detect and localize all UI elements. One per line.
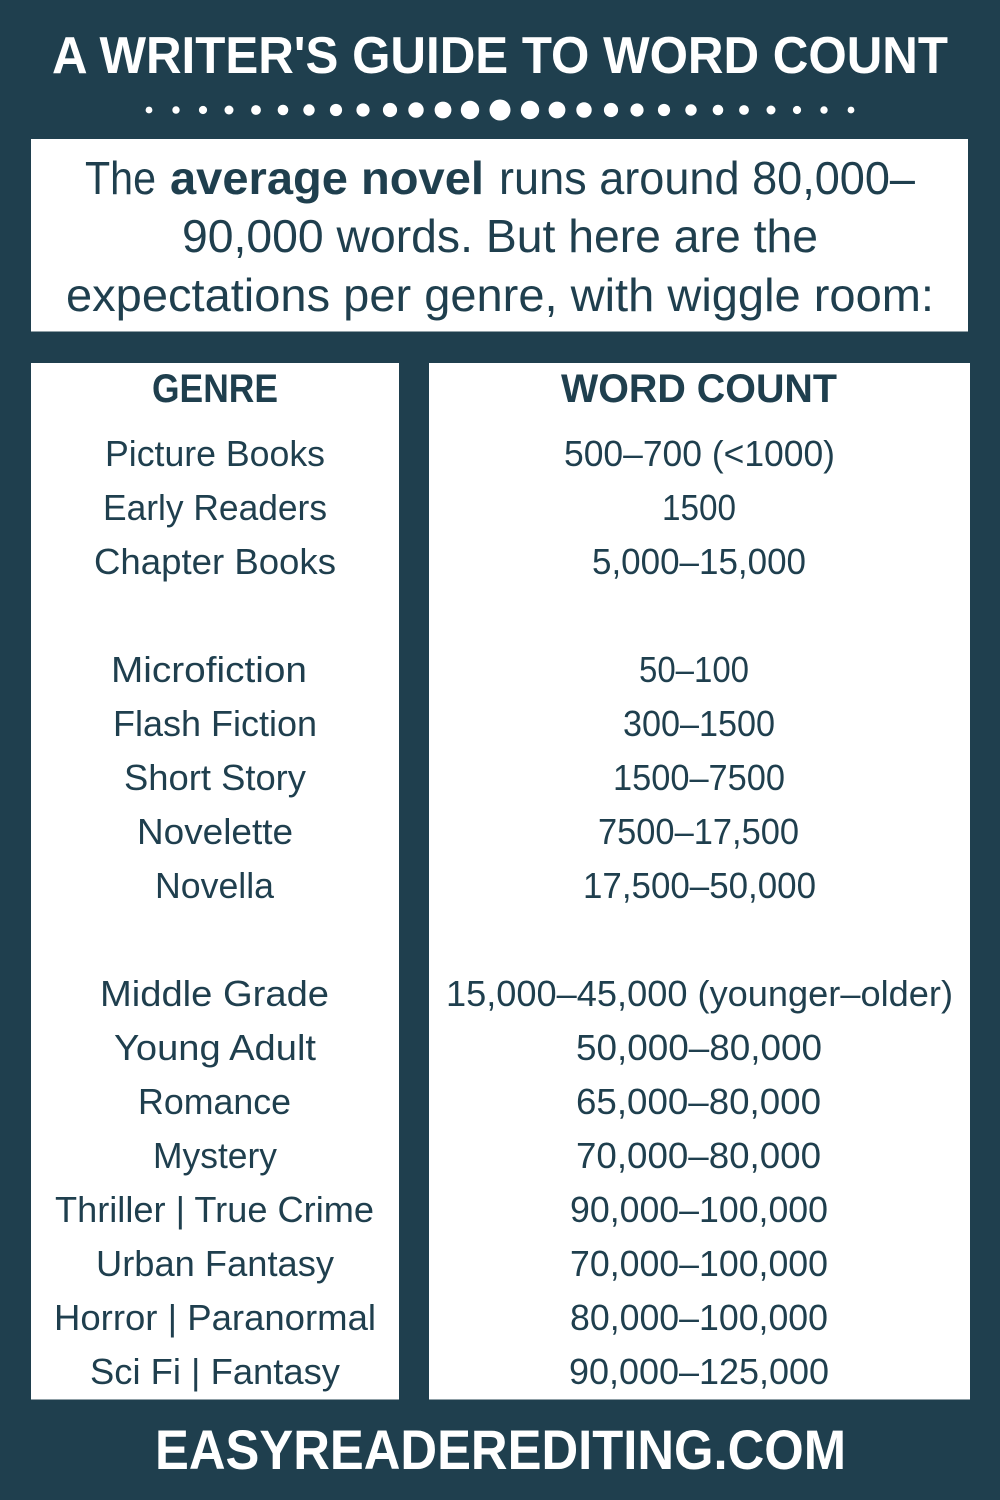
panel: genre column bbox=[31, 363, 399, 1400]
genre list: Short Story bbox=[124, 757, 306, 798]
genre list: Sci Fi | Fantasy bbox=[90, 1351, 340, 1392]
genre list: Chapter Books bbox=[94, 541, 336, 582]
genre list: Horror | Paranormal bbox=[54, 1297, 376, 1338]
genre list: Thriller | True Crime bbox=[55, 1189, 374, 1230]
word count list: 90,000–125,000 bbox=[569, 1351, 829, 1392]
word count list: 7500–17,500 bbox=[598, 811, 799, 852]
word count list: 17,500–50,000 bbox=[583, 865, 816, 906]
genre list: Flash Fiction bbox=[113, 703, 317, 744]
word count list: 300–1500 bbox=[623, 703, 775, 744]
word count list: 80,000–100,000 bbox=[570, 1297, 828, 1338]
word count list: 70,000–100,000 bbox=[570, 1243, 828, 1284]
heading: genre: GENRE bbox=[152, 367, 278, 411]
genre list: Novelette bbox=[137, 811, 293, 852]
genre list: Early Readers bbox=[103, 487, 327, 528]
genre list: Young Adult bbox=[114, 1027, 316, 1068]
genre list: Microfiction bbox=[111, 649, 307, 690]
panel: intro text: average novel bbox=[170, 152, 484, 204]
genre list: Romance bbox=[138, 1081, 291, 1122]
panel: intro text: 90,000 words. But here are the bbox=[182, 210, 818, 262]
genre list: Picture Books bbox=[105, 433, 325, 474]
word count list: 500–700 (<1000) bbox=[564, 433, 835, 474]
heading: word count: WORD COUNT bbox=[561, 367, 837, 411]
word count list: 70,000–80,000 bbox=[576, 1135, 821, 1176]
word count list: 50,000–80,000 bbox=[576, 1027, 822, 1068]
panel: intro text: runs around 80,000– bbox=[499, 152, 915, 204]
footer website: EASYREADEREDITING.COM bbox=[155, 1418, 846, 1481]
word count list: 50–100 bbox=[639, 649, 749, 690]
word count list: 1500 bbox=[662, 487, 736, 528]
panel: intro text: expectations per genre, with wiggle room: bbox=[66, 269, 934, 321]
panel: intro text bbox=[31, 139, 968, 332]
genre list bbox=[54, 433, 376, 1392]
genre list: Middle Grade bbox=[100, 973, 329, 1014]
word count list: 65,000–80,000 bbox=[576, 1081, 821, 1122]
word count list: 15,000–45,000 (younger–older) bbox=[446, 973, 953, 1014]
dotted divider bbox=[146, 100, 854, 120]
panel: intro text: The bbox=[85, 152, 156, 204]
genre list: Urban Fantasy bbox=[96, 1243, 334, 1284]
word count list bbox=[446, 433, 953, 1392]
word count list: 5,000–15,000 bbox=[592, 541, 806, 582]
word count list: 90,000–100,000 bbox=[570, 1189, 828, 1230]
word count list: 1500–7500 bbox=[613, 757, 785, 798]
title: A WRITER'S GUIDE TO WORD COUNT bbox=[52, 27, 948, 85]
panel: word count column bbox=[429, 363, 970, 1400]
genre list: Mystery bbox=[153, 1135, 277, 1176]
genre list: Novella bbox=[155, 865, 275, 906]
